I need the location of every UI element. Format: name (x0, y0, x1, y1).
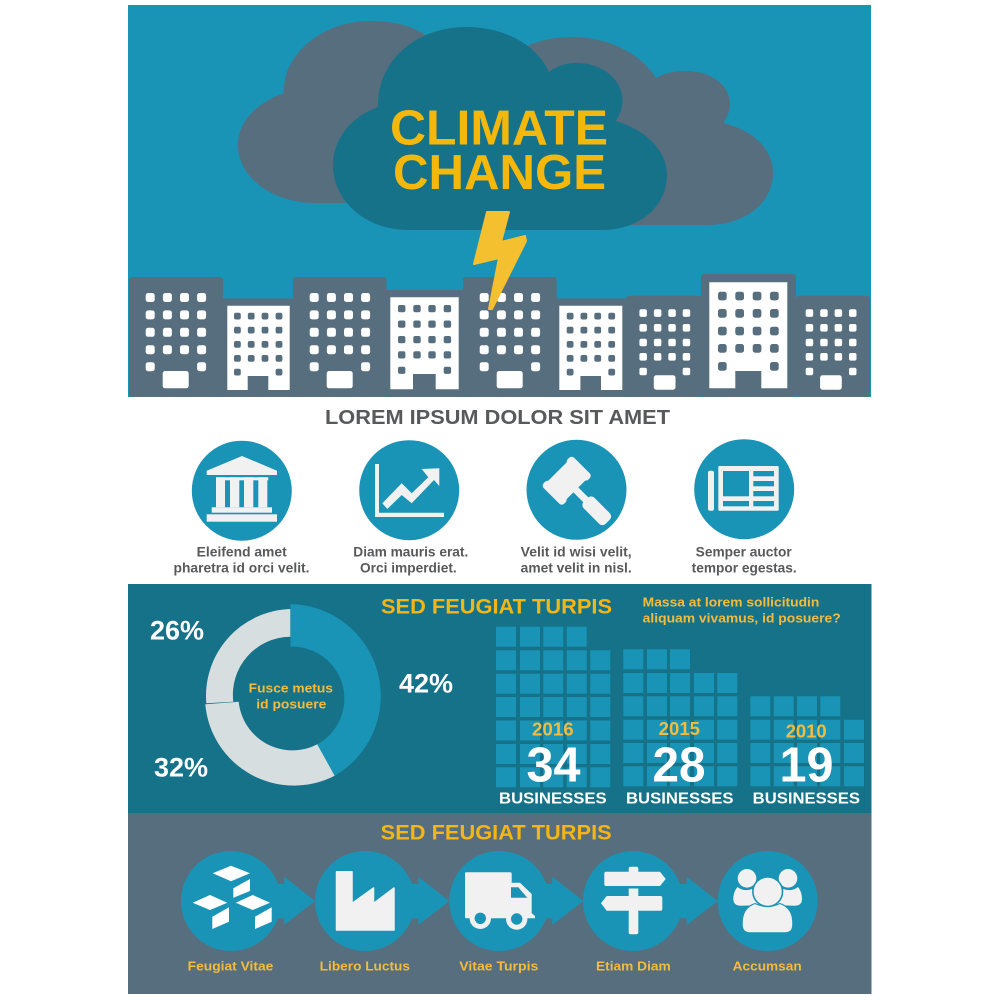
front storm cloud (333, 27, 667, 230)
feature: bank (174, 441, 310, 576)
heading: SED FEUGIAT TURPIS (381, 821, 612, 844)
building 9 (796, 296, 870, 397)
donut centre text (249, 680, 333, 711)
icon: factory (315, 851, 415, 951)
step labels (188, 958, 802, 973)
step labels: Feugiat Vitae (188, 958, 273, 973)
building 5 (463, 277, 557, 397)
pictogram 2015: 2015 (659, 718, 700, 739)
caption (353, 545, 468, 576)
pictogram 2016: 2016 (532, 719, 574, 740)
pictogram 2010: 19 (780, 739, 834, 793)
icon: signpost (583, 851, 683, 951)
icon: truck (449, 851, 549, 951)
step labels: Etiam Diam (596, 958, 671, 973)
pictogram 2016: 34 (526, 739, 580, 793)
building 2 (222, 298, 294, 397)
hero panel (128, 5, 871, 397)
pictogram 2010: BUSINESSES (753, 790, 860, 807)
caption: Diam mauris erat. (353, 545, 468, 560)
question text: aliquam vivamus, id posuere? (643, 610, 841, 625)
donut labels: 26% (150, 615, 204, 645)
icon: bank (192, 441, 292, 541)
caption: Eleifend amet (197, 545, 287, 560)
building 1 (129, 277, 223, 397)
donut labels (150, 615, 453, 783)
title: CLIMATE (390, 100, 608, 156)
feature: newspaper (692, 439, 797, 576)
building 7 (626, 296, 702, 397)
step labels: Vitae Turpis (459, 958, 538, 973)
caption: tempor egestas. (692, 561, 797, 576)
caption (521, 545, 632, 576)
pictogram 2015: BUSINESSES (626, 790, 734, 807)
pictogram 2016: BUSINESSES (499, 790, 607, 807)
icon: people (718, 851, 818, 951)
caption: Velit id wisi velit, (521, 545, 632, 560)
heading: lorem ipsum: LOREM IPSUM DOLOR SIT AMET (325, 406, 670, 429)
icon: gavel (526, 440, 626, 540)
question text (643, 595, 841, 625)
donut labels: 32% (154, 753, 208, 783)
panel: statistics (128, 584, 872, 813)
caption (174, 545, 310, 576)
step labels: Accumsan (733, 958, 802, 973)
back storm cloud (238, 21, 773, 225)
caption (692, 545, 797, 576)
caption: Semper auctor (696, 545, 792, 560)
icon: chart (359, 440, 459, 540)
feature: growth chart (353, 440, 468, 576)
icon: lightning bolt (474, 212, 526, 309)
pictogram 2010 (750, 696, 864, 807)
title: CHANGE (393, 145, 606, 200)
building 8 (701, 274, 796, 397)
panel: process (128, 813, 872, 994)
pictogram 2015 (623, 649, 737, 807)
pictogram 2016 (496, 627, 610, 807)
building 3 (293, 277, 386, 397)
building 4 (386, 290, 464, 397)
caption: pharetra id orci velit. (174, 561, 310, 576)
building 6 (556, 298, 627, 397)
pictogram 2010: 2010 (786, 720, 827, 742)
icon: boxes (181, 851, 281, 951)
step labels: Libero Luctus (320, 958, 410, 973)
title (390, 100, 608, 200)
arrows (270, 877, 718, 925)
donut chart (205, 604, 381, 786)
caption: amet velit in nisl. (521, 561, 632, 576)
pictogram 2015: 28 (652, 739, 706, 793)
icon: newspaper (694, 439, 794, 539)
heading: SED FEUGIAT TURPIS (381, 595, 612, 618)
caption: Orci imperdiet. (360, 561, 457, 576)
donut centre text: id posuere (256, 696, 326, 711)
feature: gavel (521, 440, 632, 576)
donut labels: 42% (399, 669, 453, 699)
donut centre text: Fusce metus (249, 680, 333, 695)
question text: Massa at lorem sollicitudin (643, 595, 819, 610)
skyline (129, 274, 870, 397)
